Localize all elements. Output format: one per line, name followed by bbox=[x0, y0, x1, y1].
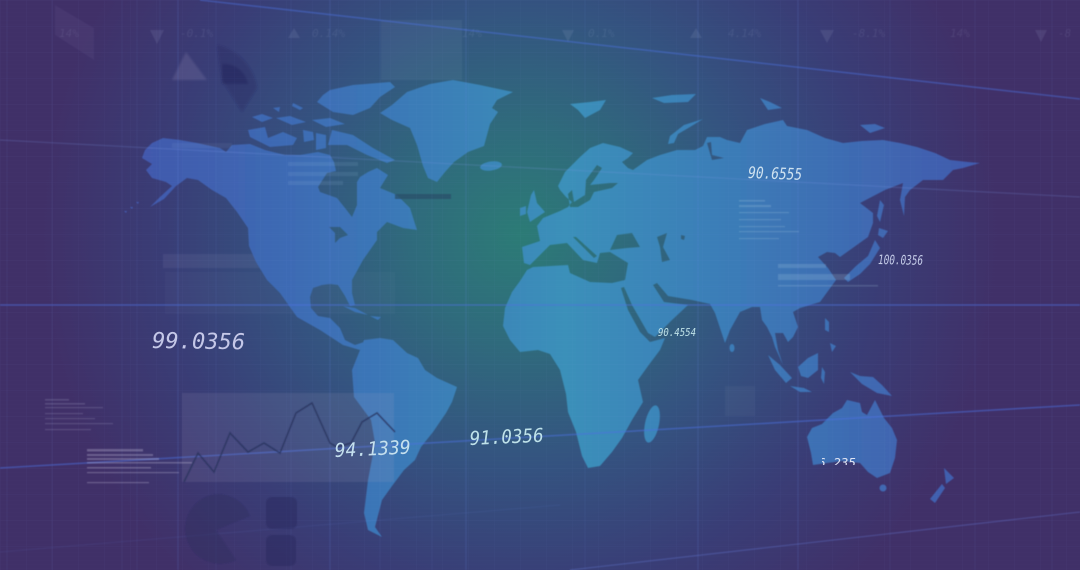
faint top ticker of percentages and arrows: -8.1% bbox=[852, 27, 885, 40]
Borneo bbox=[798, 353, 818, 378]
value: 90.4554: 90.4554 bbox=[658, 326, 696, 339]
Novaya Zemlya bbox=[668, 119, 703, 144]
value: 99.0356: 99.0356 bbox=[152, 329, 245, 355]
faint pie and triangle, top left bbox=[172, 45, 257, 112]
New Guinea bbox=[850, 372, 892, 396]
value: clipped figure over Australia: 6.235 bbox=[818, 456, 856, 470]
faint top ticker of percentages and arrows bbox=[59, 27, 1072, 44]
small text block, East Asia bbox=[778, 264, 878, 286]
Sakhalin bbox=[877, 200, 884, 222]
New Zealand bbox=[944, 468, 954, 484]
faint top ticker of percentages and arrows: 4.14% bbox=[728, 27, 761, 40]
Arctic islands bbox=[317, 82, 395, 115]
Japan bbox=[844, 240, 880, 282]
North America bbox=[142, 138, 417, 350]
chart panel bbox=[182, 393, 394, 482]
value: 100.0356: 100.0356 bbox=[878, 253, 923, 269]
value: 91.0356: 91.0356 bbox=[469, 425, 544, 450]
Greenland bbox=[380, 80, 513, 182]
line chart bbox=[184, 403, 395, 482]
South America bbox=[352, 338, 457, 537]
world map bbox=[124, 80, 980, 537]
faint top ticker of percentages and arrows: 0.14% bbox=[312, 27, 345, 40]
faint icon: angled block, top left bbox=[55, 5, 94, 60]
value: 90.6555: 90.6555 bbox=[748, 163, 802, 184]
Svalbard bbox=[570, 100, 606, 118]
faint panel, Indian Ocean bbox=[725, 386, 755, 416]
Aleutian dots bbox=[124, 202, 139, 213]
Franz Josef islands bbox=[652, 94, 696, 103]
Sumatra bbox=[768, 355, 792, 383]
Philippines bbox=[825, 318, 829, 332]
rounded icon tiles bbox=[266, 497, 297, 566]
small text block, Asia bbox=[739, 200, 799, 239]
Sulawesi bbox=[821, 367, 825, 384]
Tasmania bbox=[880, 484, 886, 492]
faint bars over Canada bbox=[172, 143, 358, 185]
New Siberian islands bbox=[860, 124, 885, 133]
Java bbox=[790, 386, 812, 392]
British Isles bbox=[527, 190, 545, 222]
Madagascar bbox=[641, 404, 663, 444]
faint top ticker of percentages and arrows: 0.1% bbox=[588, 27, 615, 40]
Australia bbox=[807, 400, 897, 478]
faint text panel, top centre bbox=[381, 20, 462, 80]
Caribbean bbox=[343, 306, 368, 315]
faint top ticker of percentages and arrows: -8 bbox=[1058, 27, 1072, 40]
small text block, left bbox=[45, 399, 113, 430]
Iceland bbox=[479, 160, 503, 172]
Hokkaido bbox=[878, 228, 888, 238]
Africa and Eurasia bbox=[503, 120, 980, 468]
small text block, lower left bbox=[87, 449, 192, 483]
value: 94.1339: 94.1339 bbox=[334, 437, 411, 462]
Sri Lanka bbox=[730, 344, 734, 352]
faint top ticker of percentages and arrows: -0.1% bbox=[180, 27, 213, 40]
pie chart, bottom left bbox=[185, 494, 250, 564]
faint top ticker of percentages and arrows: 14% bbox=[59, 27, 79, 40]
faint horizontal bars and panels behind North America bbox=[163, 254, 395, 314]
faint top ticker of percentages and arrows: 14% bbox=[950, 27, 970, 40]
Severnaya islands bbox=[760, 98, 782, 110]
faint top ticker of percentages and arrows: 14% bbox=[462, 27, 482, 40]
faint dark bar over Atlantic bbox=[395, 194, 451, 199]
